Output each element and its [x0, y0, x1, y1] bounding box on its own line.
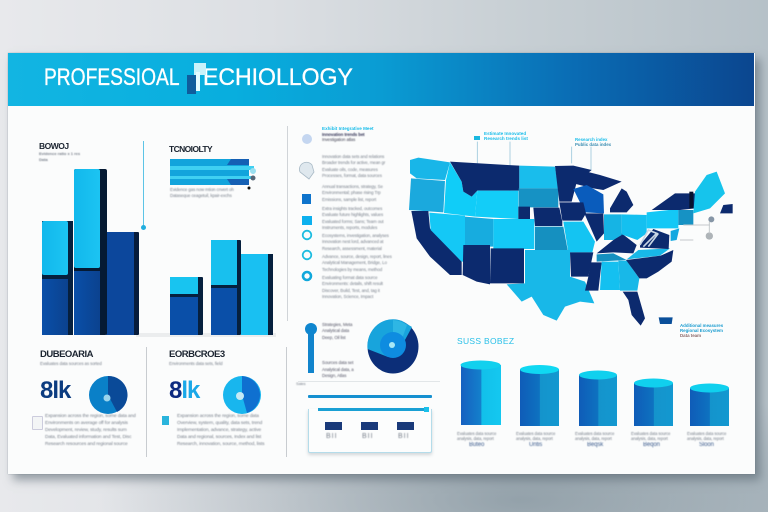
cylinder labels: Evaluates data source: [575, 431, 614, 436]
paragraph: [44, 413, 136, 447]
paragraph: Implementation, advance, strategy, active: [177, 428, 261, 433]
text list: Annual transactions, strategy, Se: [322, 184, 383, 189]
icon: title T mark: [187, 63, 206, 94]
text list: Advance, source, design, report, lines: [322, 254, 392, 259]
map small markers: [680, 216, 714, 240]
text list: Analytical Management, Bridge, Lo: [322, 260, 387, 265]
paragraph: Environments on average off for analysis: [45, 421, 128, 426]
gauge labels: [322, 322, 354, 378]
text list: [322, 126, 392, 300]
cylinder labels: Beqon: [643, 442, 660, 448]
text list: Ecosystems, investigation, analyses: [322, 233, 389, 238]
gauge labels: Deep, Oil list: [322, 335, 346, 340]
cylinder labels: Evaluates data source: [516, 431, 555, 436]
heading: left chart: [38, 141, 80, 162]
heading: technology box: TCNOIOLTY: [169, 144, 212, 154]
donut chart: [367, 319, 418, 374]
paragraph: Data, Evaluated information and Test, Disc: [45, 435, 131, 440]
panel: stat right: Environments data sets, field: [169, 361, 222, 366]
text list: Evaluating format data source: [322, 275, 377, 280]
map legend: Data team: [680, 333, 701, 338]
text list: Environments: details, shift result: [322, 281, 383, 286]
chart: horizontal stacked bar: [170, 159, 256, 190]
big number: 8lk: [169, 377, 199, 404]
heading: left chart: BOWOJ: [39, 141, 69, 151]
map labels: Research trends list: [484, 136, 528, 141]
cylinder labels: analysis, data, report: [457, 436, 494, 441]
timeline bar: [308, 395, 432, 398]
gauge labels: Strategies, Meta: [322, 322, 352, 327]
divider pin: [141, 141, 146, 230]
paragraph: Research, innovation, source, method, lists: [177, 442, 264, 447]
vertical divider: [146, 347, 147, 457]
vertical divider: [286, 347, 287, 457]
cylinder labels: Sloon: [699, 442, 714, 448]
heading: left chart: Evidence ratio x 1 res: [39, 151, 80, 156]
text list: Evaluated forms; Sans; Team out: [322, 219, 384, 224]
text: technology note: Evidence gas now mtion cnvert oh: [170, 187, 234, 192]
map legend: Regional Ecosystem: [680, 328, 723, 333]
text list: Technologies by means, method: [322, 267, 382, 272]
rule: [298, 381, 440, 382]
text: Analytical data, a: [322, 367, 354, 372]
cylinder labels: Evaluates data source: [631, 431, 670, 436]
text list: Evaluate oils, code, measures: [322, 167, 378, 172]
chart: left bars: [42, 169, 276, 337]
text list: Innovation data sets and relations: [322, 154, 384, 159]
text: Innovation, Science, Impact: [322, 294, 373, 299]
title: [44, 64, 353, 91]
paragraph: Development, review, study, results sum: [45, 428, 127, 433]
text list: Instruments, reports, modules: [322, 225, 377, 230]
big number: 8lk: [40, 377, 70, 404]
panel: stat right: [162, 349, 265, 447]
cylinder labels: analysis, data, report: [575, 436, 612, 441]
gauge labels: Analytical data: [322, 328, 349, 333]
panel: stat left: [32, 349, 136, 447]
map icons: [474, 136, 480, 140]
small caption: Sales: [296, 381, 306, 386]
map legend: [680, 323, 723, 338]
text list: Broader trends for active, mean gr: [322, 160, 385, 165]
text list: Innovation nest lord, advanced at: [322, 239, 383, 244]
panel: stat left: Evaluates data sources as sorted: [40, 361, 102, 366]
map labels: Estimate Innovated: [484, 131, 526, 136]
text list: Research, assessment, material: [322, 246, 382, 251]
text list: Environmental; phase rising Trp: [322, 190, 381, 195]
heading: cylinders: SUSS BOBEZ: [457, 336, 514, 346]
cylinder labels: analysis, data, report: [631, 436, 668, 441]
text list: Emissions, sample list, report: [322, 197, 376, 202]
paragraph: Expansion across the region, some data: [177, 414, 259, 419]
heading: left chart: Data: [39, 157, 48, 162]
paragraph: Research resources and regional source: [45, 442, 128, 447]
panel: table card: BII: [362, 433, 374, 440]
panel: main sheet: [8, 53, 755, 474]
note icon: [162, 416, 169, 425]
text: Research index: [575, 137, 607, 142]
cylinder labels: [456, 431, 727, 448]
paragraph: [176, 413, 265, 447]
text: technology note: Dataseque ceagetuil, kpair-exchs: [170, 193, 232, 198]
title: PROFESSIOAL: [44, 64, 180, 91]
pie icon: [223, 376, 261, 414]
cylinder labels: Untis: [529, 442, 542, 448]
text list: Discover, Build, Test, and, tag it: [322, 288, 380, 293]
pin gauge: [305, 323, 317, 373]
cylinder labels: Evaluates data source: [457, 431, 496, 436]
cylinder labels: Buteo: [469, 442, 484, 448]
text list: Investigation atlas: [322, 137, 355, 142]
header banner: [8, 53, 754, 106]
text list: Processes, format, data sources: [322, 173, 382, 178]
text list: Innovation trends bet: [322, 132, 365, 137]
text: Design, Atlas: [322, 373, 346, 378]
paragraph: Overview, system, quality, data sets, trend: [177, 421, 262, 426]
heading: DUBEOARIA: [40, 349, 93, 360]
cylinder labels: analysis, data, report: [687, 436, 724, 441]
panel: table card: BII: [398, 433, 410, 440]
paragraph: Expansion across the region, some data and: [45, 414, 136, 419]
cylinder labels: Beqsk: [587, 442, 603, 448]
chart: cylinders: [460, 360, 729, 426]
vertical divider: [287, 126, 288, 321]
text list: Exhibit Integrative Meet: [322, 126, 374, 131]
map labels: [484, 131, 528, 141]
panel: table card: BII: [326, 433, 338, 440]
text list: Evaluate future highlights, values: [322, 212, 383, 217]
panel: table card: [308, 409, 432, 453]
text: technology note: [170, 187, 234, 198]
gauge labels: Sources data set: [322, 360, 353, 365]
note icon: [32, 416, 43, 430]
map: USA: [409, 142, 733, 326]
cylinder labels: analysis, data, report: [516, 436, 553, 441]
map legend: Additional measures: [680, 323, 723, 328]
text list: Extra insights tracked, outcomes: [322, 206, 382, 211]
cylinder labels: Evaluates data source: [687, 431, 726, 436]
text: Public data index: [575, 142, 611, 147]
paragraph: Data and regional, sources, Index and list: [177, 435, 261, 440]
heading: EORBCROE3: [169, 349, 225, 360]
icon list: [299, 134, 314, 282]
title: ECHIOLLOGY: [203, 64, 353, 91]
pie icon: [89, 376, 128, 414]
